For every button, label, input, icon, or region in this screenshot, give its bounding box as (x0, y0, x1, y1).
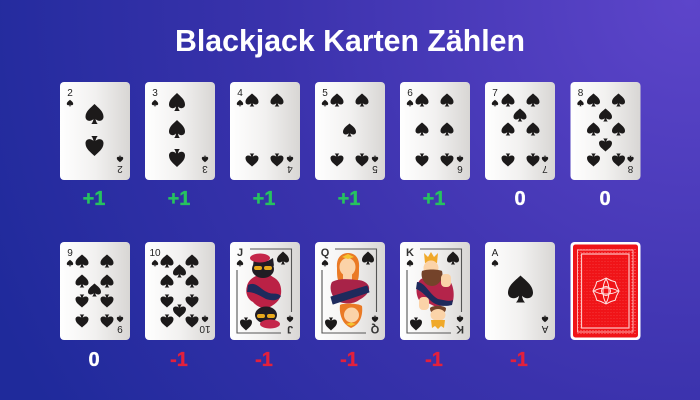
card: ace of spades (485, 242, 555, 340)
king figure (416, 252, 454, 329)
card: 2 of spades (60, 82, 130, 180)
card: jack of spades: J (237, 247, 243, 259)
card: red back (570, 242, 640, 340)
card: 10 of spades (145, 242, 215, 340)
card: king of spades (400, 242, 470, 340)
scores: bottom row: -1 (340, 349, 358, 371)
card: 6 of spades: 6 (457, 163, 463, 174)
jack figure (246, 254, 281, 328)
card: 7 of spades: 7 (542, 163, 548, 174)
card: 4 of spades: 4 (237, 88, 243, 99)
scores: top row: 0 (514, 188, 526, 210)
card: queen of spades (315, 242, 385, 340)
back ornament (593, 278, 619, 304)
card: 3 of spades (145, 82, 215, 180)
scores: top row: +1 (83, 188, 105, 210)
scores: bottom row: 0 (88, 349, 100, 371)
scores: bottom row: -1 (510, 349, 528, 371)
scores: top row (83, 188, 611, 210)
card: jack of spades (230, 242, 300, 340)
card: 6 of spades (400, 82, 470, 180)
card: 2 of spades: 2 (67, 88, 73, 99)
card: 4 of spades: 4 (287, 163, 293, 174)
scores: top row: +1 (168, 188, 190, 210)
card: queen of spades: Q (321, 247, 330, 259)
card: 5 of spades (315, 82, 385, 180)
card: 9 of spades: 9 (117, 323, 123, 334)
card: king of spades: K (456, 323, 464, 335)
card: 9 of spades: 9 (67, 248, 73, 259)
queen figure (331, 253, 369, 328)
card: 8 of spades (570, 82, 640, 180)
card: 8 of spades: 8 (578, 88, 584, 99)
scores: bottom row: -1 (425, 349, 443, 371)
card: 10 of spades: 10 (199, 323, 211, 334)
scores: bottom row: -1 (255, 349, 273, 371)
scores: top row: 0 (599, 188, 611, 210)
card: 7 of spades (485, 82, 555, 180)
card: 10 of spades: 10 (149, 248, 161, 259)
card: 9 of spades (60, 242, 130, 340)
scores: top row: +1 (338, 188, 360, 210)
card: queen of spades: Q (370, 323, 379, 335)
card: 3 of spades: 3 (202, 163, 208, 174)
scores: bottom row: -1 (170, 349, 188, 371)
card: 2 of spades: 2 (117, 163, 123, 174)
card: 3 of spades: 3 (152, 88, 158, 99)
card: 8 of spades: 8 (627, 163, 633, 174)
scores: top row: +1 (423, 188, 445, 210)
card: 5 of spades: 5 (372, 163, 378, 174)
card: ace of spades: A (492, 248, 499, 259)
card: 6 of spades: 6 (407, 88, 413, 99)
title: Blackjack Karten Zählen (175, 23, 525, 58)
card: 7 of spades: 7 (492, 88, 498, 99)
scores: bottom row (88, 349, 528, 371)
card: jack of spades: J (287, 323, 293, 335)
card: king of spades: K (406, 247, 414, 259)
card: 4 of spades (230, 82, 300, 180)
scores: top row: +1 (253, 188, 275, 210)
card: 5 of spades: 5 (322, 88, 328, 99)
card: ace of spades: A (541, 323, 548, 334)
